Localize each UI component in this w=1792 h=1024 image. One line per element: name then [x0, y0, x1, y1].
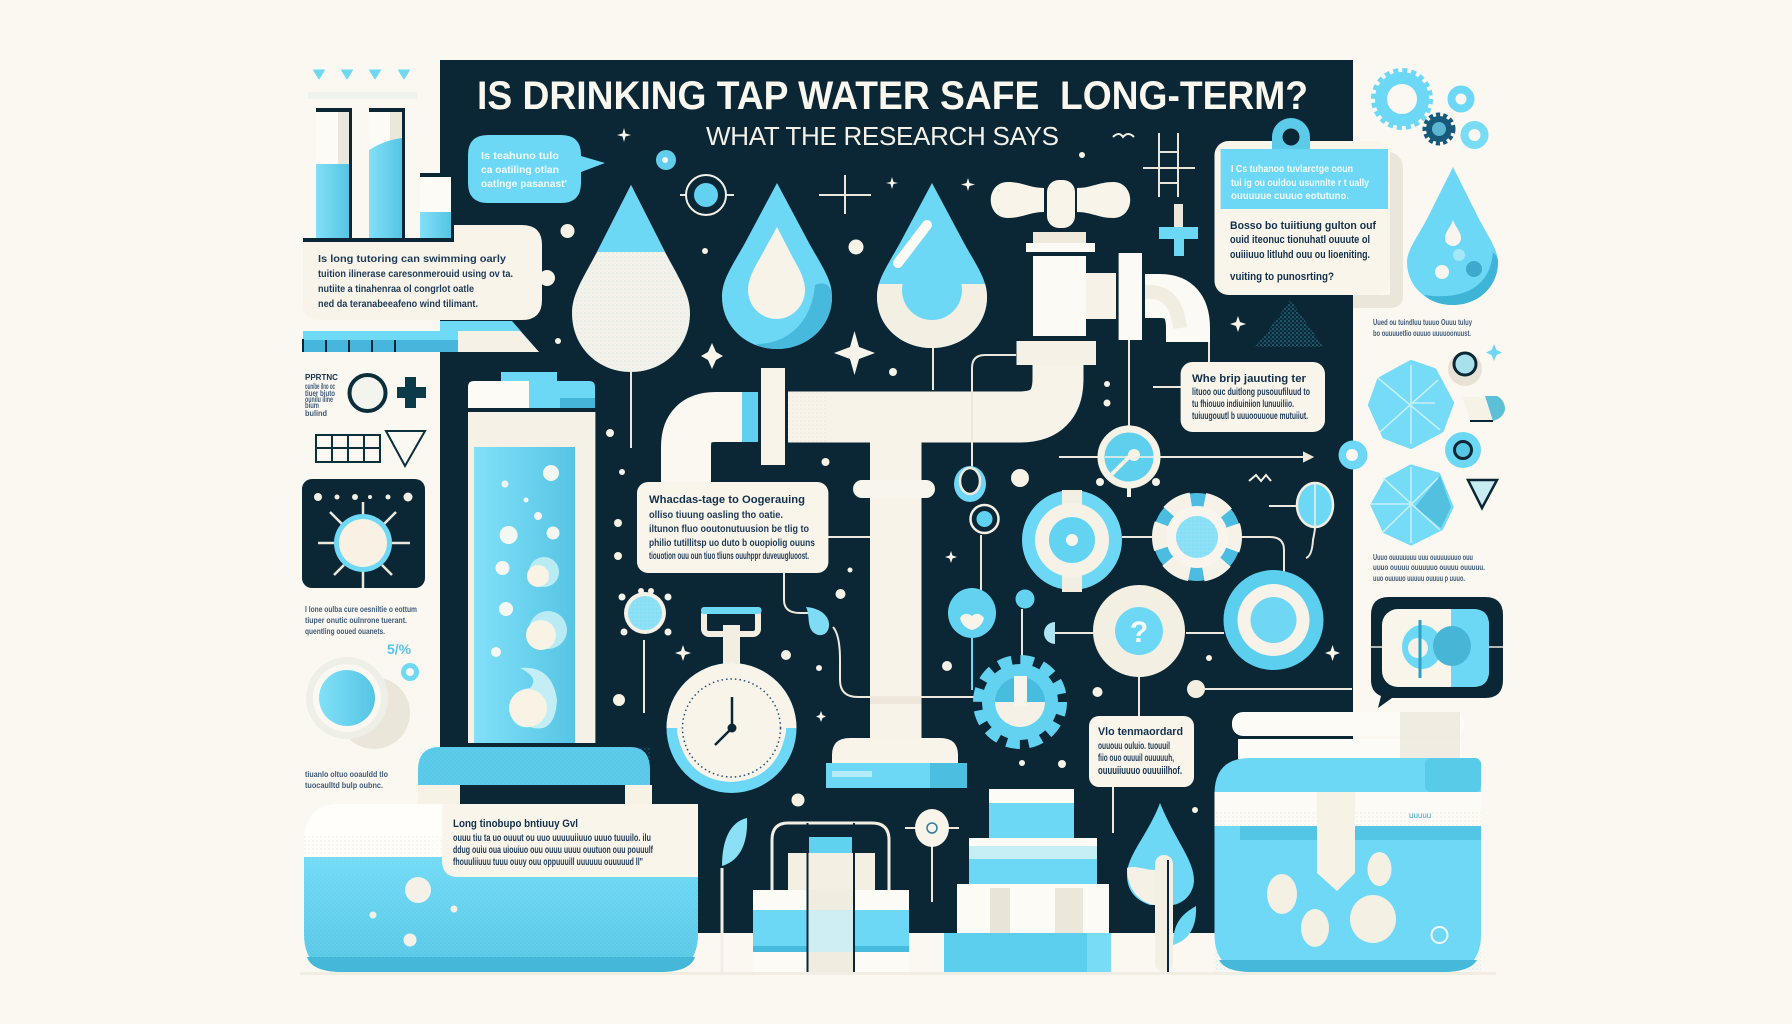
blue striped band: [303, 321, 539, 352]
callout: middle left box: olliso tiuung oasling tho oatie.: [649, 509, 783, 521]
horizontal pipe: [788, 365, 1058, 417]
icon: question mark circle: ?: [1130, 616, 1148, 649]
bubble: top left note: [468, 135, 605, 203]
icon: squiggles: [1113, 134, 1271, 481]
icon: ring pins: [948, 466, 1034, 638]
callout: middle left box: iltunon fluo ooutonutuusion be tlig to: [649, 523, 809, 535]
body: [1214, 758, 1481, 972]
icon: gear B: [1153, 493, 1241, 581]
mini text: [305, 373, 338, 418]
icon: ladder and plus: [1143, 133, 1198, 256]
callout: middle left box: philio tutillitsp uo duto b ouopiolig ouuns: [649, 537, 815, 549]
icon: ring with shadow: [1448, 352, 1482, 386]
text block: left caption: [305, 770, 388, 790]
icon: plus: [397, 377, 426, 408]
text block: right upper note: bo ouuuuetlio ouuuo uuuuoonuust.: [1373, 329, 1471, 338]
text block: left note: quentling ooued ouanets.: [305, 627, 385, 636]
icon: ring: [350, 375, 386, 411]
icon: grid: [316, 435, 380, 462]
icon: water drop three: [877, 183, 987, 390]
callout: left text box: ned da teranabeeafeno wind tilimant.: [318, 298, 478, 310]
panel: right card: vuiting to punosrting?: [1230, 271, 1334, 283]
illustration: left tank: [304, 747, 698, 972]
panel: right card: ouid iteonuc tionuhatl ouuute ol: [1230, 234, 1370, 246]
callout: lower box: ouuuiiuuuo ouuuiilhof.: [1098, 765, 1182, 777]
icon: gear A: [1022, 490, 1122, 592]
panel: right card: ouiiiuuo litluhd ouu ou lioeniting.: [1230, 249, 1370, 261]
icon: leaf drop: [1127, 803, 1196, 972]
icon: water cylinder with bubbles: [468, 372, 595, 743]
text block: left caption: tuocaulltd bulp oubnc.: [305, 781, 383, 790]
text block: tank note: ouuu tiu ta uo ouuut ou uuo uuuuuiiuuo uuuo tuuuilo. ilu: [453, 832, 651, 844]
bubble: top left note: Is teahuno tulo: [481, 150, 559, 162]
panel: right card: Bosso bo tuiitiung gulton ouf: [1230, 220, 1376, 232]
text block: tank note: Long tinobupo bntiuuy Gvl: [453, 818, 578, 830]
panel: right card shadow: [1353, 152, 1403, 308]
icon: lens with percentage: 5/%: [387, 641, 412, 657]
stand: [418, 747, 650, 785]
text block: left caption: tiuanlo oltuo ooauldd tlo: [305, 770, 388, 779]
icon: cross: [819, 175, 871, 214]
illustration: stacked filter blocks: [944, 789, 1111, 972]
decorative stars, dots and targets: [555, 128, 1340, 813]
panel: sun icon card: [302, 479, 425, 588]
icon: right side shapes: [1371, 344, 1505, 543]
small left icons: [305, 373, 426, 466]
panel: left bar chart: [303, 70, 465, 242]
icon: dotted triangle: [1255, 300, 1323, 347]
bubbles: [1267, 852, 1396, 947]
mini text: bium: [305, 401, 319, 410]
callout: left text box: nutiite a tinahenraa ol congrlot oatle: [318, 283, 474, 295]
icon: stopwatch: [666, 607, 796, 793]
mini text: ounibe ilno oc: [305, 382, 335, 391]
panel: right card: [1214, 118, 1390, 295]
text block: right lower note: uuuo ouuuu ouuuuuo ouuuu ouuuuu.: [1373, 563, 1485, 572]
dark central panel: [440, 60, 1353, 933]
icon: leaf: [722, 818, 747, 972]
callout: lower box: fiio ouo ouuuil ouuuuuh,: [1098, 752, 1174, 764]
tap body: [1016, 232, 1188, 365]
icon: lens with percentage: [306, 641, 416, 749]
icon: snowflake polygon B: [1371, 467, 1451, 543]
text block: right lower note: Uuuo ouuuuuuu uuu ouuuuuuuo ouu: [1373, 553, 1473, 562]
callout: lower box: Vlo tenmaordard: [1098, 726, 1183, 738]
panel: right card: tui ig ou ouldou usunnlte r t ually: [1231, 177, 1369, 189]
icon: small drop: [806, 607, 829, 635]
callout: left text box: tuition ilinerase caresonmerouid using ov ta.: [318, 268, 513, 280]
panel: right card: I Cs tuhanoo tuvlarctge ooun: [1231, 163, 1353, 175]
panel: right card: ouuuuue cuuuo eotutuno.: [1231, 190, 1349, 202]
callout: left text box: [303, 225, 555, 320]
icon: blue gear: [979, 661, 1061, 743]
ground shadow: [300, 972, 1496, 975]
mini text: ounilu iline: [305, 395, 333, 404]
icon: side pin: [1187, 483, 1333, 698]
icon: large right drop: [1407, 167, 1498, 305]
icon: pressure gauge: [1096, 425, 1160, 497]
icon: target: [680, 175, 734, 215]
panel: right dark bubble: [1371, 597, 1503, 708]
mini text: bulind: [305, 409, 327, 418]
text block: right upper note: [1373, 318, 1472, 338]
icon: ring on panel edge: [1338, 440, 1368, 470]
callout: lower box: [1089, 716, 1194, 787]
callout: left text box: Is long tutoring can swimming oarly: [318, 253, 506, 265]
bubble: top left note: oatlnge pasanast': [481, 178, 567, 190]
icon: dots: [555, 152, 1212, 813]
text block: tank note: [442, 804, 698, 877]
text block: tank note: fhouuliiuuu tuuu ouuy ouu oppuuuill uuuuuu ouuuuud ll": [453, 856, 643, 868]
text block: tank note: ddug ouiu oua uiouiuo ouu ouuu uuuu ouutuon ouu pouuulf: [453, 844, 653, 856]
mini text: PPRTNC: [305, 373, 338, 382]
tap handle: [991, 180, 1130, 228]
icon: snowflake polygon A: [1371, 363, 1451, 446]
text block: right lower note: [1373, 553, 1485, 583]
illustration: tap and pipes: [686, 180, 1188, 788]
callout: middle left box: [637, 482, 828, 573]
icon: triangle: [386, 431, 425, 466]
text block: left note: I lone oulba cure oesniltie o eottum: [305, 605, 417, 614]
callout: right pipe box: tuiuugouutl b uuuoouuoue mutuiiut.: [1192, 410, 1308, 422]
callout: middle left box: tiouotion ouu oun tiuo tliuns ouuhppr duveuugluoost.: [649, 550, 809, 562]
icon: sparkles: [617, 128, 1340, 722]
tank bubbles: [370, 877, 458, 946]
left elbow: [686, 417, 745, 482]
illustration: right tank: [1214, 712, 1481, 972]
title: IS DRINKING TAP WATER SAFE LONG-TERM?: [477, 74, 1308, 118]
icon: prism: [1462, 396, 1505, 421]
vertical column: [870, 442, 922, 738]
icon: dotted triangle small: [1468, 480, 1497, 508]
icon: question mark circle: [1044, 585, 1185, 677]
base: [832, 738, 958, 763]
tank body: [304, 804, 698, 972]
callout: right pipe box: Whe brip jauuting ter: [1192, 373, 1307, 385]
illustration: filter lantern: [753, 823, 909, 972]
text block: left note: [305, 605, 417, 636]
icon: microbe pin: [618, 588, 672, 636]
callout: right pipe box: [1181, 362, 1325, 432]
thin connector lines: [644, 340, 1352, 833]
mini text: tiuer biuto: [305, 389, 335, 398]
icon: circle C: [1224, 570, 1324, 670]
text block: right upper note: Uued ou tuindluu tuuuo Ouuu tuluy: [1373, 318, 1472, 327]
callout: right pipe box: lituoo ouc duitlong pusouufiluud to: [1192, 386, 1310, 398]
icon: blue ring: [1445, 432, 1481, 468]
callout: middle left box: Whacdas-tage to Oogerauing: [649, 494, 805, 506]
icon: water drop two: [722, 183, 832, 349]
icon: gears top right: [1374, 71, 1484, 145]
bubble: top left note: ca oatiling otlan: [481, 164, 559, 176]
subtitle: WHAT THE RESEARCH SAYS: [706, 121, 1059, 151]
text block: left note: tiuper onutic oulnrone tuerant.: [305, 616, 407, 625]
icon: water drop one: [572, 185, 690, 448]
callout: lower box: ouuouu ouluio. tuouuil: [1098, 740, 1170, 752]
illustration: right tank: uuuuu: [1409, 811, 1431, 820]
icon: target pin: [905, 809, 959, 902]
callout: right pipe box: tu fhiouuo indiuiniion lunuuiliio.: [1192, 398, 1294, 410]
lid: [1232, 712, 1464, 736]
text block: right lower note: uuo ouuuuo uuuuu ouuuu p uuuo.: [1373, 574, 1465, 583]
